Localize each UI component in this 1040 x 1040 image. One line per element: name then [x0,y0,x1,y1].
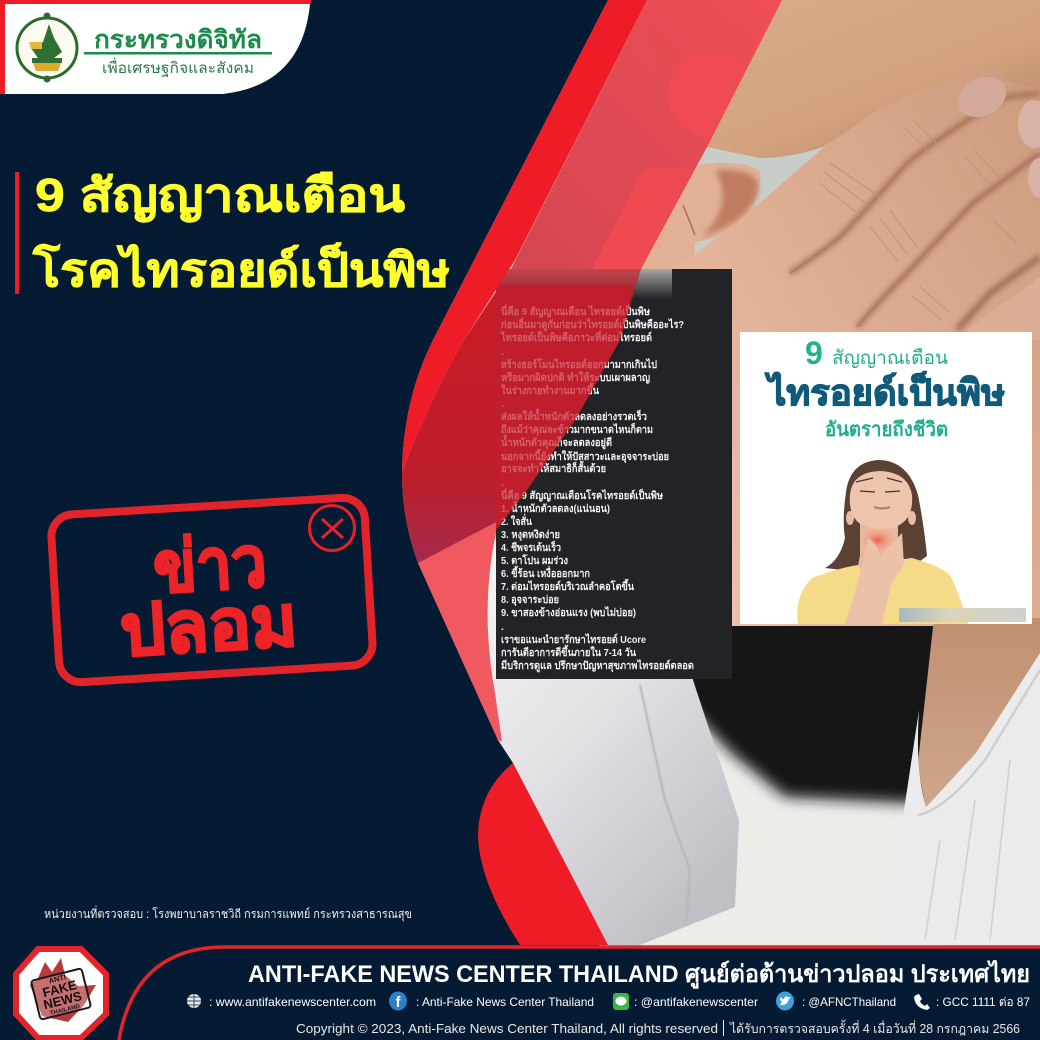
copyright: Copyright © 2023, Anti-Fake News Center Thailand, All rights reserved [296,1022,718,1036]
photo: lab coat sleeve [470,540,739,945]
translucent red overlay on message panel [496,269,641,530]
message text: การันตีอาการดีขึ้นภายใน 7-14 วัน [501,644,637,659]
red tinted panel area [496,285,633,530]
footer [16,947,1040,1040]
footer heading: ANTI-FAKE NEWS CENTER THAILAND ศูนย์ต่อต้านข่าวปลอม ประเทศไทย [248,959,1030,989]
inset heading line 2: ไทรอยด์เป็นพิษ [764,370,1005,413]
message text: . [501,346,504,358]
stamp text: ปลอม [118,582,299,672]
facebook text: : Anti-Fake News Center Thailand [416,995,594,1009]
red corner shape bottom [478,763,608,945]
message text: . [501,398,504,410]
message text: นี่คือ 9 สัญญาณเตือน ไทรอยด์เป็นพิษ [501,303,650,318]
message text: อาจจะทำให้สมาธิก็สั้นด้วย [501,460,606,475]
message text: เราขอแนะนำยารักษาไทรอยด์ Ucore [501,633,646,646]
stamp text [118,523,299,672]
inset heading line 3: อันตรายถึงชีวิต [825,418,948,441]
photo: thumb [630,163,760,290]
message text: . [501,477,504,489]
lighter shapes inside swoosh [592,55,734,269]
stop sign logo: THAILAND [50,1004,81,1017]
photo: patient chest [919,618,1040,807]
message text: มีบริการดูแล ปรึกษาปัญหาสุขภาพไทรอยด์ตลอด [501,659,694,673]
logo panel [0,0,311,94]
title line 2: โรคไทรอยด์เป็นพิษ [32,242,450,296]
message text: ส่งผลให้น้ำหนักตัวลดลงอย่างรวดเร็ว [501,408,647,423]
stop sign logo: ANTI [48,972,67,985]
icon: website globe [187,994,201,1008]
ministry subtitle: เพื่อเศรษฐกิจและสังคม [102,57,254,77]
message text: นี่คือ 9 สัญญาณเตือนโรคไทรอยด์เป็นพิษ [501,487,663,502]
photo: dark blurred background [680,610,950,805]
icon: twitter [776,992,794,1010]
text panel: fake message screenshot [496,269,732,679]
icon: facebook [389,992,407,1011]
title [15,169,450,296]
message text: 7. ต่อมไทรอยด์บริเวณลำคอโตขึ้น [501,578,635,593]
stamp x icon [310,506,354,550]
inset heading line 1: สัญญาณเตือน [832,348,948,369]
icon: facebook: f [396,994,402,1011]
message text: 6. ขี้ร้อน เหงื่อออกมาก [501,565,590,580]
source note: หน่วยงานที่ตรวจสอบ : โรงพยาบาลราชวิถี กรมการแพทย์ กระทรวงสาธารณสุข [44,905,412,922]
translucent red swoosh upper [511,0,782,269]
message text: ในร่างกายทำงานมากขึ้น [501,382,600,397]
dark red swoosh middle [402,269,511,563]
icon: phone [914,994,930,1010]
light red swoosh lower [418,516,502,742]
message text: 4. ชีพจรเต้นเร็ว [501,540,561,554]
message text: . [501,621,504,633]
message text: ก่อนอื่นมาดูกันก่อนว่าไทรอยด์เป็นพิษคืออะไร? [501,316,684,332]
icon: line [613,993,629,1010]
ministry name: กระทรวงดิจิทัล [94,26,262,54]
stamp: fake news [50,497,374,683]
blurred source bar [899,608,1026,622]
line text: : @antifakenewscenter [634,995,758,1009]
message text: นอกจากนี้ยังทำให้ปัสสาวะและอุจจาระบ่อย [501,448,669,464]
stop sign logo: FAKE [41,977,79,1000]
message text: น้ำหนักตัวคุณก็จะลดลงอยู่ดี [501,434,612,450]
photo: hand and fingers [675,40,1040,626]
phone text: : GCC 1111 ต่อ 87 [936,995,1030,1009]
inset: thyroid article image [740,332,1032,624]
message text: 3. หงุดหงิดง่าย [501,529,560,542]
message text: 9. ขาสองข้างอ่อนแรง (พบไม่บ่อย) [501,606,636,619]
message text: 5. ตาโปน ผมร่วง [501,554,568,567]
twitter text: : @AFNCThailand [802,995,896,1009]
stamp text: ข่าว [151,523,269,608]
message text [500,303,694,673]
message text: สร้างฮอร์โมนไทรอยด์ออกมามากเกินไป [501,358,657,371]
inset heading number: 9 [805,335,823,371]
message text: 1. น้ำหนักตัวลดลง(แน่นอน) [501,500,610,515]
message text: 2. ใจสั่น [501,513,533,528]
solid red band [402,0,647,473]
verification note: ได้รับการตรวจสอบครั้งที่ 4 เมื่อวันที่ 28 กรกฎาคม 2566 [729,1019,1020,1036]
stop sign logo: NEWS [42,988,84,1012]
photo: floor backdrop [640,620,940,950]
website text: : www.antifakenewscenter.com [209,995,376,1009]
photo: jaw and neck [640,0,1040,158]
photo: person holding throat [400,0,1040,950]
illustration: woman with sore throat [797,460,968,624]
title line 1: 9 สัญญาณเตือน [35,169,406,222]
stop sign logo [16,949,106,1038]
message text: 8. อุจจาระบ่อย [501,594,559,607]
navy panel left [0,0,608,947]
logo emblem [17,12,77,82]
message text: ไทรอยด์เป็นพิษคือภาวะที่ต่อมไทรอยด์ [500,329,652,344]
message text: หรือมากผิดปกติ ทำให้ระบบเผาผลาญ [501,370,650,384]
message text: ถึงแม้ว่าคุณจะข้าวมากขนาดไหนก็ตาม [500,422,653,437]
photo: white ribbed shirt [877,653,1040,945]
